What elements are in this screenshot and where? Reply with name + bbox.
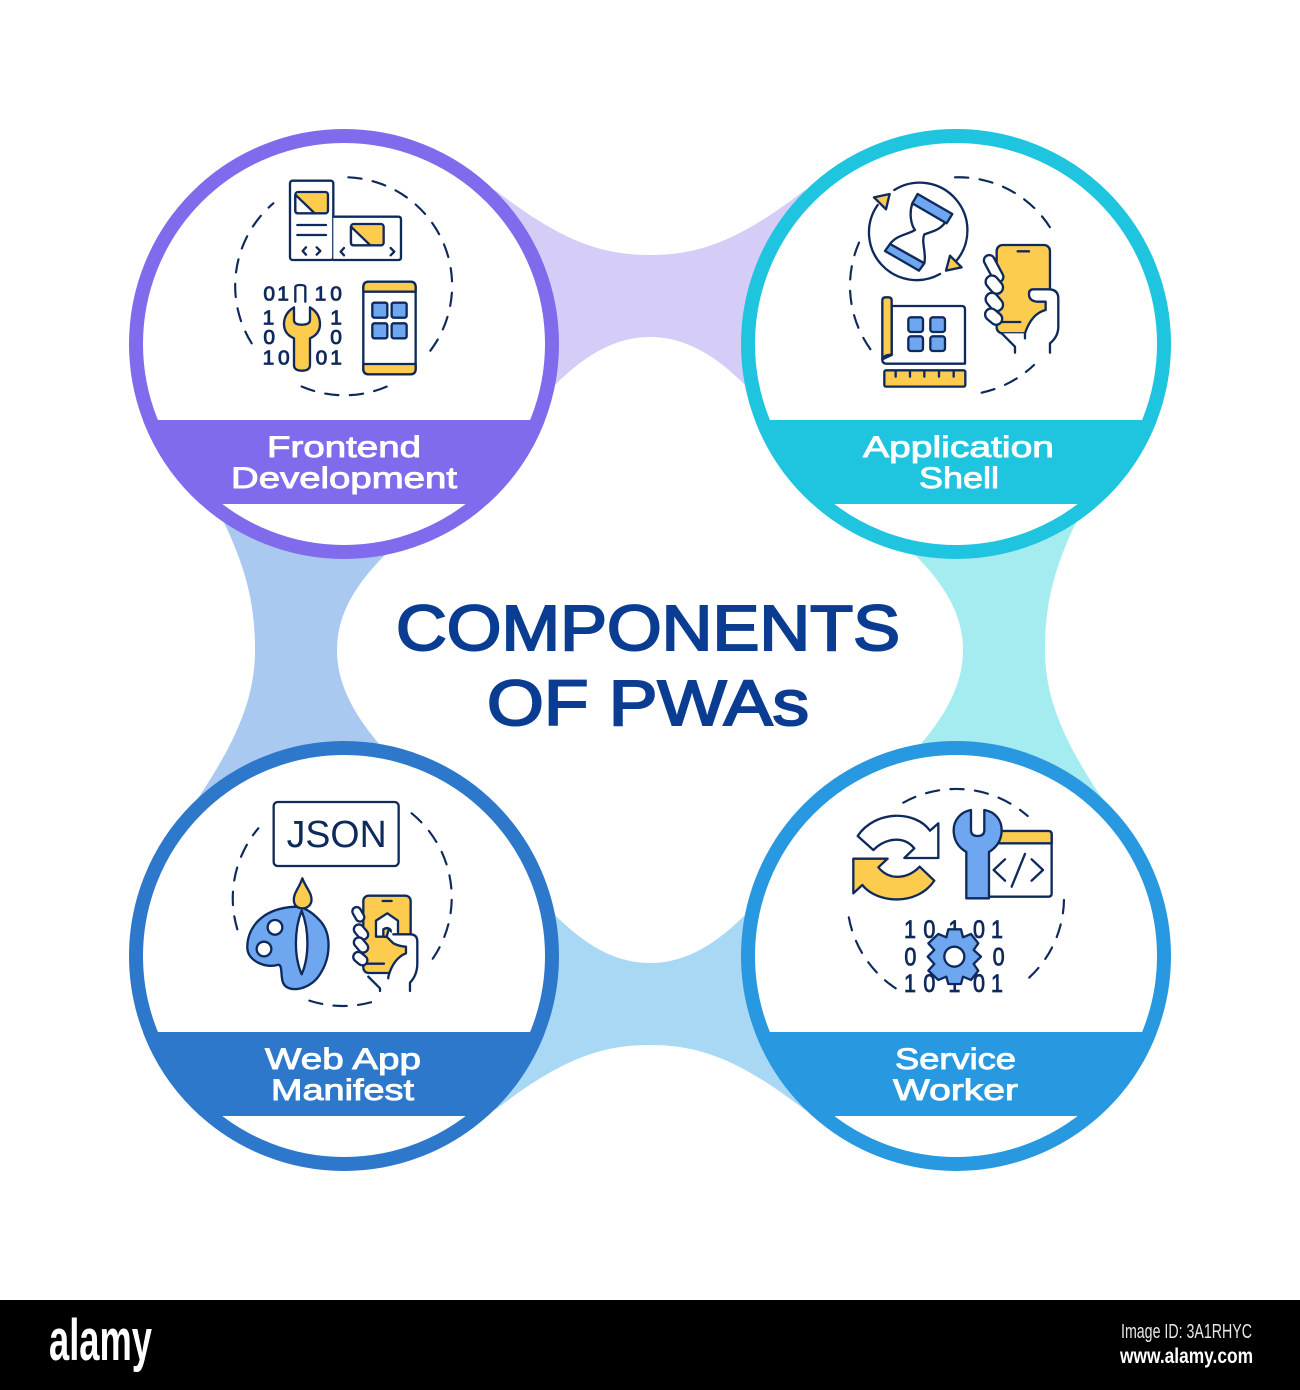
panel: frontend development <box>120 136 570 552</box>
icon: service worker: 0 <box>993 943 1005 971</box>
icon: service worker: 0 <box>973 916 985 944</box>
icon: web app manifest <box>233 802 452 1006</box>
text: JSON: JSON <box>287 814 387 856</box>
icon: service worker: 0 <box>973 970 985 998</box>
label band: frontend development: Development <box>231 462 458 495</box>
label band: frontend development <box>143 420 545 504</box>
label band: web app manifest <box>143 1032 545 1116</box>
icon: service worker: 0 <box>923 916 935 944</box>
icon: frontend development: 0 <box>263 283 275 306</box>
panel: service worker <box>732 748 1182 1164</box>
connector: top <box>495 190 805 385</box>
icon: frontend development: 1 <box>263 346 274 369</box>
label band: service worker: Worker <box>893 1074 1018 1107</box>
icon: frontend development: 1 <box>315 283 326 306</box>
connector: bottom <box>495 915 805 1110</box>
icon: service worker: 0 <box>904 943 916 971</box>
label band: frontend development: Frontend <box>267 431 421 464</box>
footer bar <box>0 1300 1300 1390</box>
icon: service worker: 1 <box>991 970 1003 998</box>
icon: frontend development: 1 <box>277 283 289 306</box>
icon: frontend development: 0 <box>330 283 342 306</box>
connector: right <box>915 495 1110 810</box>
title <box>396 592 900 739</box>
icon: frontend development <box>235 177 452 395</box>
label band: service worker: Service <box>895 1043 1016 1076</box>
label band: application shell <box>755 420 1157 504</box>
icon: frontend development: 1 <box>330 346 342 369</box>
label band: web app manifest: Web App <box>265 1043 421 1076</box>
title: COMPONENTS <box>396 592 900 664</box>
icon: frontend development: 0 <box>316 346 327 369</box>
connector: left <box>190 495 385 810</box>
icon: service worker: 1 <box>991 916 1003 944</box>
icon: frontend development: 1 <box>330 306 342 329</box>
icon: service worker: 1 <box>948 970 960 998</box>
icon: service worker: 1 <box>948 916 960 944</box>
panel: application shell <box>732 136 1182 552</box>
icon: frontend development: 0 <box>278 346 290 369</box>
label band: service worker <box>755 1032 1157 1116</box>
website: www.alamy.com <box>1119 1345 1253 1368</box>
icon: service worker: 0 <box>923 970 935 998</box>
label band: web app manifest: Manifest <box>271 1074 415 1107</box>
icon: service worker <box>848 789 1064 998</box>
icon: frontend development: 0 <box>330 326 342 349</box>
logo: alamy: alamy <box>49 1308 152 1373</box>
icon: frontend development: 1 <box>263 306 274 329</box>
panel: web app manifest <box>120 748 570 1164</box>
icon: service worker: 1 <box>904 970 916 998</box>
icon: application shell <box>850 177 1058 393</box>
icon: frontend development: 0 <box>263 326 275 349</box>
icon: service worker: 1 <box>904 916 916 944</box>
label band: application shell: Application <box>863 431 1054 464</box>
image id: Image ID: 3A1RHYC <box>1121 1321 1252 1343</box>
title: OF PWAs <box>487 667 809 739</box>
label band: application shell: Shell <box>919 462 999 495</box>
